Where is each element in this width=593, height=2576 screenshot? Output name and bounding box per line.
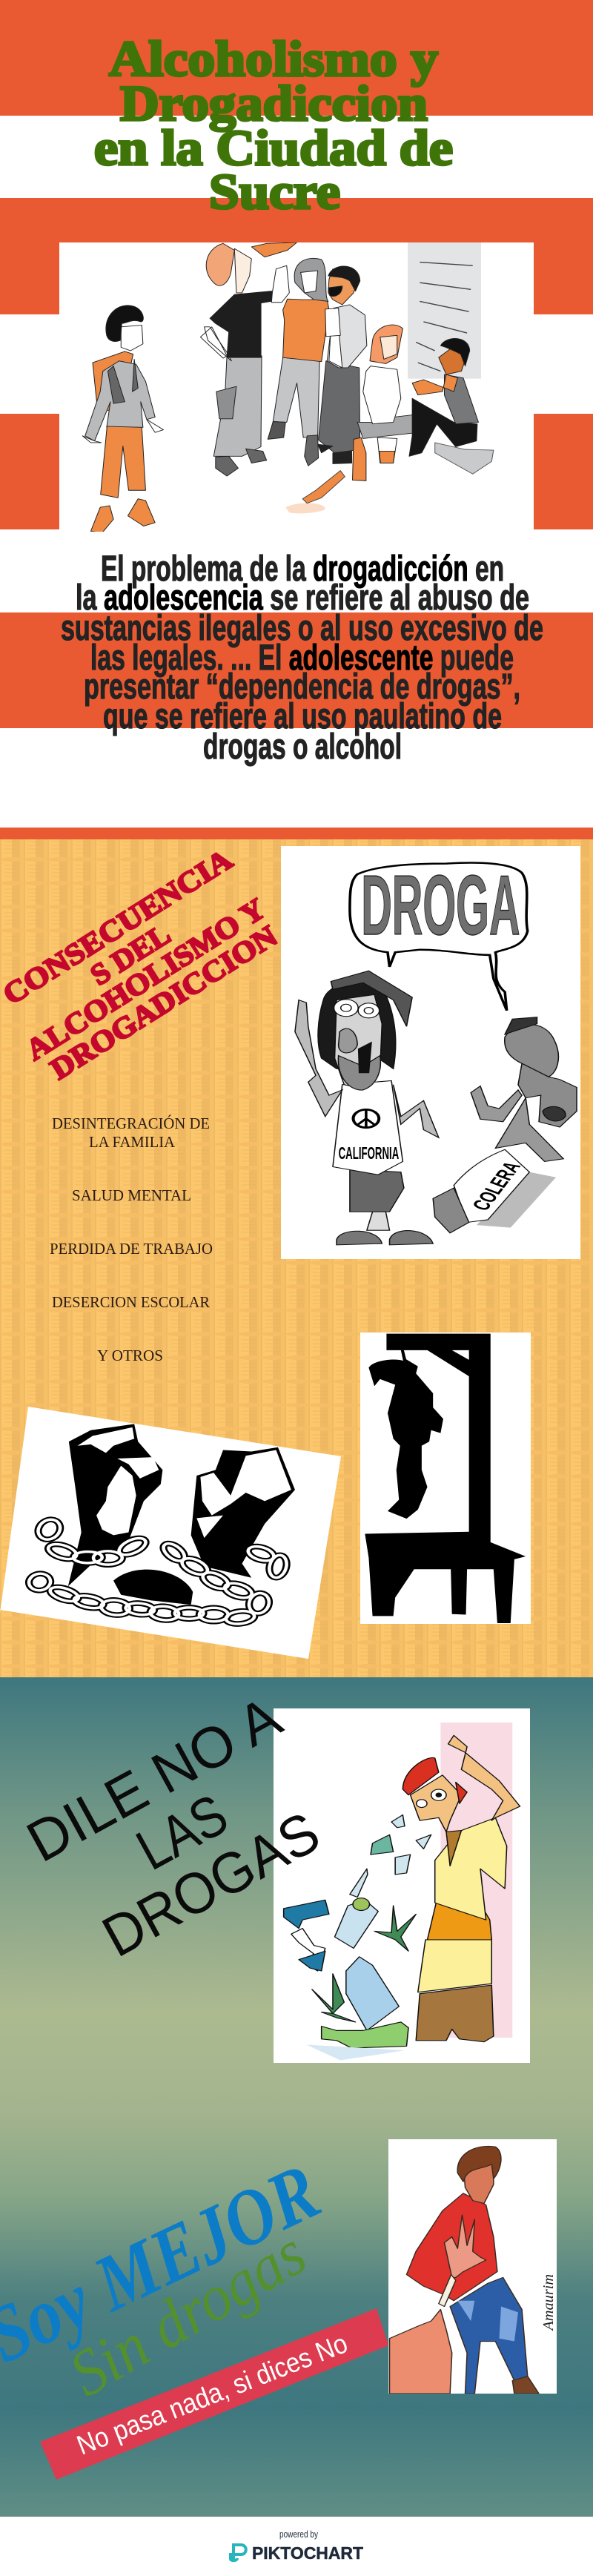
intro paragraph: El problema de la drogadicción en bbox=[101, 549, 504, 589]
footer: powered by piktochart bbox=[231, 2529, 363, 2563]
heading: consequences: DROGADICCION bbox=[44, 919, 283, 1086]
title: Drogadiccion bbox=[120, 75, 428, 131]
title: Sucre bbox=[209, 163, 340, 219]
heading: consequences: ALCOHOLISMO Y bbox=[20, 891, 271, 1067]
image panel: person refusing a cigarette: Amaurim bbox=[540, 2274, 557, 2332]
title: en la Ciudad de bbox=[94, 119, 453, 176]
panel: say no background bbox=[0, 1677, 593, 2517]
title bbox=[94, 30, 453, 219]
heading: consequences: S DEL bbox=[85, 917, 176, 992]
heading: dile no a las drogas bbox=[16, 1684, 330, 1969]
image panel: boy with drugs falling bbox=[274, 1708, 530, 2063]
intro paragraph: las legales. ... El adolescente puede bbox=[90, 638, 514, 678]
hippie figure: CALIFORNIA bbox=[339, 1144, 399, 1163]
red jacket bbox=[406, 2193, 497, 2301]
grey haired girl bbox=[268, 258, 329, 466]
wall and bench bbox=[408, 242, 494, 474]
image panel: person refusing a cigarette bbox=[388, 2139, 557, 2394]
list of consequences bbox=[50, 1114, 213, 1364]
cigarette and hand bbox=[439, 2274, 456, 2307]
list of consequences: DESERCION ESCOLAR bbox=[52, 1293, 210, 1311]
blonde girl sitting bbox=[353, 325, 419, 480]
footer: powered by piktochart: PIKTOCHART bbox=[252, 2543, 363, 2563]
panel: consequences background bbox=[0, 839, 593, 1677]
list of consequences: Y OTROS bbox=[97, 1347, 163, 1364]
small sick figure bbox=[433, 1017, 577, 1233]
fallen bottle and spill bbox=[285, 471, 345, 513]
hippie figure bbox=[295, 971, 439, 1245]
banner: no pasa nada, si dices no: No pasa nada, si dices No bbox=[73, 2328, 351, 2460]
intro paragraph bbox=[61, 549, 543, 767]
broken shackle bbox=[113, 1570, 193, 1605]
heading: dile no a las drogas: DROGAS bbox=[92, 1799, 330, 1969]
left fist bbox=[68, 1424, 162, 1586]
title: Alcoholismo y bbox=[109, 30, 438, 87]
intro paragraph: drogas o alcohol bbox=[203, 727, 402, 767]
raised hand bbox=[444, 2215, 486, 2277]
list of consequences: DESINTEGRACIÓN DE bbox=[52, 1114, 210, 1132]
sitting boy bbox=[409, 338, 478, 456]
list of consequences: PERDIDA DE TRABAJO bbox=[50, 1240, 213, 1258]
head bbox=[463, 2164, 494, 2204]
list of consequences: SALUD MENTAL bbox=[72, 1186, 191, 1204]
chain bbox=[25, 1517, 289, 1625]
heading: dile no a las drogas: LAS bbox=[126, 1781, 238, 1883]
tall boy drinking bbox=[200, 242, 297, 476]
image panel: gallows silhouette bbox=[360, 1332, 531, 1624]
falling drugs bbox=[284, 1815, 431, 2061]
image panel: chained fists bbox=[0, 1401, 348, 1661]
laughing boy bbox=[318, 266, 367, 463]
icon: piktochart logo bbox=[231, 2545, 246, 2560]
background: orange and white stripes bbox=[0, 0, 593, 839]
right fist bbox=[191, 1447, 295, 1578]
heading: dile no a las drogas: DILE NO A bbox=[16, 1684, 291, 1875]
slogan: sin drogas: Sin drogas bbox=[58, 2217, 318, 2411]
boy bbox=[402, 1735, 520, 2042]
list of consequences: LA FAMILIA bbox=[89, 1133, 176, 1151]
heading: consequences: CONSECUENCIA bbox=[0, 842, 238, 1011]
image panel: DROGA cartoon bbox=[281, 846, 580, 1259]
image panel: group of teenagers drinking bbox=[59, 242, 534, 533]
small sick figure: COLERA bbox=[468, 1159, 526, 1214]
boy with backpack bbox=[82, 306, 163, 533]
heading: consequences bbox=[0, 842, 283, 1086]
jeans bbox=[450, 2277, 528, 2394]
speech bubble bbox=[350, 857, 528, 1011]
hanged figure bbox=[368, 1350, 443, 1519]
footer: powered by piktochart: powered by bbox=[279, 2529, 318, 2540]
